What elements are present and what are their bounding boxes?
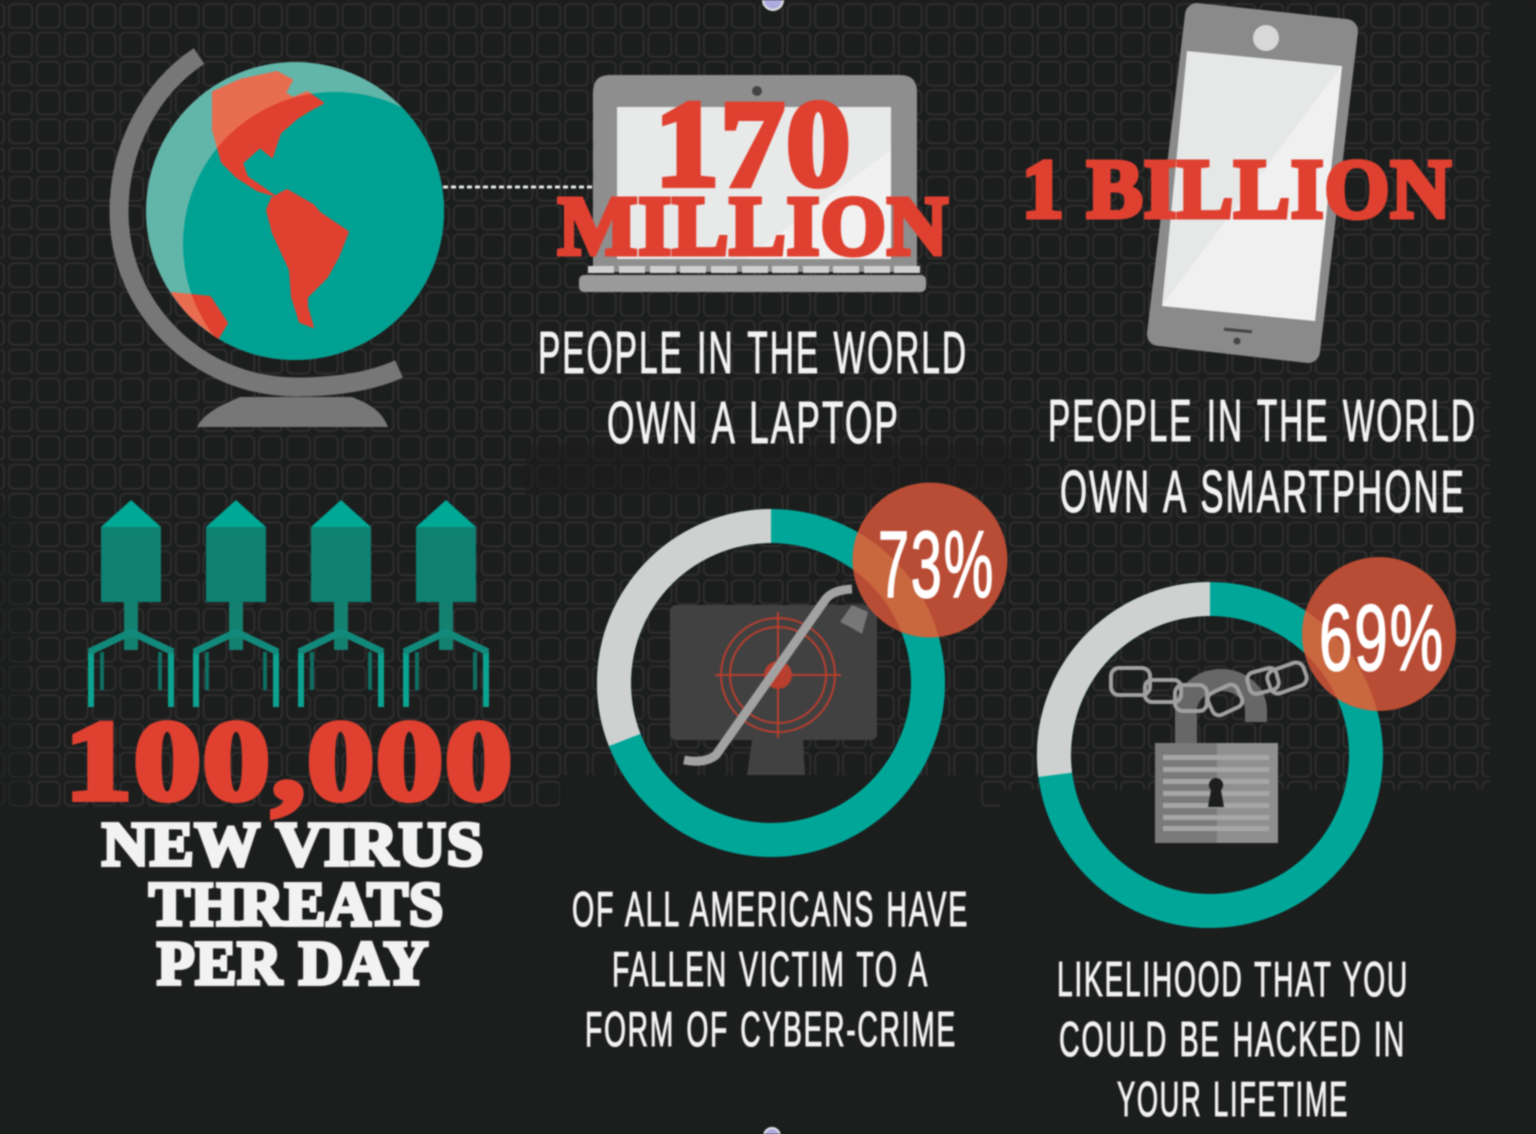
text: 73% caption: FORM OF CYBER-CRIME: [585, 1003, 957, 1057]
text: 73% caption: FALLEN VICTIM TO A: [612, 943, 929, 997]
icon: virus row: [89, 500, 488, 707]
text: smartphone caption: [1048, 388, 1477, 525]
icon: virus 2: [194, 500, 278, 707]
dotted connector: [443, 186, 592, 188]
callout: 73% badge: [852, 482, 1008, 638]
icon: globe on stand: [119, 56, 487, 427]
text: 69% caption: YOUR LIFETIME: [1117, 1073, 1349, 1127]
text: laptop caption: OWN A LAPTOP: [607, 390, 900, 456]
callout: 73% badge: 73%: [878, 512, 995, 618]
text: laptop caption: [538, 320, 968, 456]
chart: 73% donut: [614, 526, 928, 840]
text: new virus threats per day: NEW VIRUS: [102, 811, 484, 879]
stat: 170 million: [558, 75, 949, 273]
text: 73% caption: [572, 883, 969, 1057]
text: new virus threats per day: THREATS: [149, 871, 444, 939]
text: laptop caption: PEOPLE IN THE WORLD: [538, 320, 968, 386]
stat: 1 billion: 1 BILLION: [1022, 143, 1452, 236]
top connector dot: [763, 0, 783, 10]
icon: virus 1: [89, 500, 173, 707]
stat: 100,000: 100,000: [65, 697, 514, 824]
icon: monitor target and crowbar: [670, 589, 877, 775]
bottom connector dot: [764, 1128, 780, 1134]
callout: 69% badge: 69%: [1319, 585, 1445, 690]
text: new virus threats per day: PER DAY: [157, 930, 429, 998]
icon: virus 4: [404, 500, 488, 707]
callout: 69% badge: [1301, 556, 1457, 712]
icon: padlock and chain: [1111, 660, 1309, 843]
icon: virus 3: [299, 500, 383, 707]
chart: 69% donut: [1054, 599, 1366, 911]
icon: smartphone: [1159, 15, 1346, 351]
text: 69% caption: [1057, 953, 1409, 1127]
stat: 170 million: 170: [655, 75, 852, 212]
text: new virus threats per day: [102, 811, 484, 998]
icon: laptop: [579, 75, 926, 292]
stat: 170 million: MILLION: [558, 180, 949, 273]
text: 73% caption: OF ALL AMERICANS HAVE: [572, 883, 969, 937]
